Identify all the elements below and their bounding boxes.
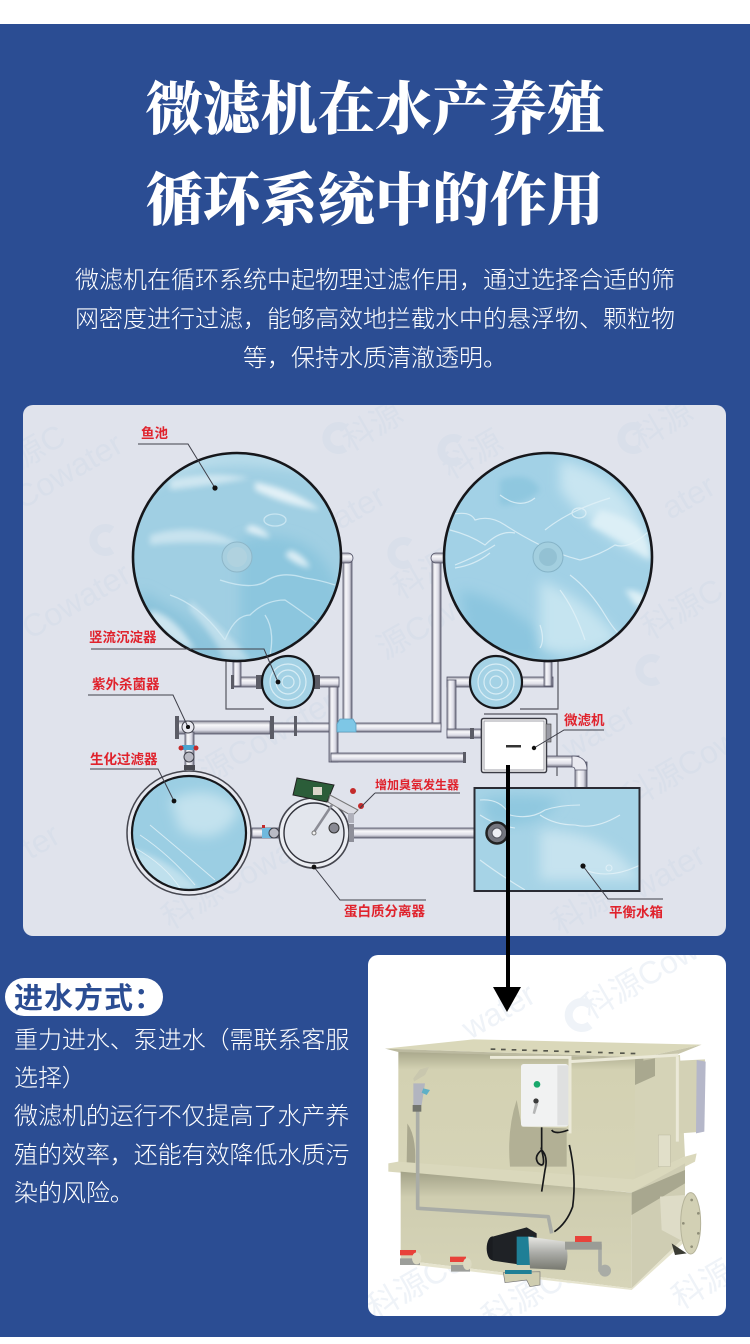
leader lines [88,444,663,900]
watermarks on panel: 科源 [336,395,409,458]
description text: 染的风险。 [14,1180,134,1207]
intro text: 微滤机在循环系统中起物理过滤作用，通过选择合适的筛 [75,267,675,294]
upper body [398,1052,635,1180]
balance tank [474,788,640,891]
right-side box [680,1059,705,1133]
pipe: UV to biofilter [185,732,194,772]
control box [521,1064,568,1127]
pipe: biofilter to skimmer [252,828,282,838]
panel background [23,405,726,936]
label: UV sterilizer: 紫外杀菌器 [92,676,160,692]
watermarks on panel: 科源 [436,423,509,486]
description text: 选择） [14,1065,86,1092]
watermarks on panel: ter [16,816,66,866]
strainer [413,1067,430,1112]
arrow [493,765,521,1012]
label: microfilter: 微滤机 [564,712,605,728]
vertical settler right [470,656,522,708]
label: fish pond: 鱼池 [141,425,168,441]
watermarks on panel: 科源Cowater [166,683,342,806]
pipe: left settler outlet [233,677,339,687]
watermarks on panel: Cowater [8,425,129,516]
watermarks on panel: Cowater [16,555,137,646]
cream conduit [490,1055,678,1142]
side flange [660,1193,701,1255]
white product card [368,955,726,1316]
label: protein skimmer: 蛋白质分离器 [344,903,425,919]
rim [388,1153,697,1193]
watermarks on panel: 科源 [626,393,699,456]
title line 1: 微滤机在水产养殖 [146,79,604,142]
heading chip: 进水方式： [14,982,164,1015]
pipe: right settler outlet [447,677,553,687]
grey inlet pipe [418,1110,600,1272]
description text [14,1027,349,1207]
pipe: UV section [178,721,270,734]
pool 2 [444,453,653,661]
panel: system diagram [5,405,726,1316]
control box shadow [509,1100,567,1167]
title [146,79,604,233]
description text: 重力进水、泵进水（需联系客服 [14,1027,349,1054]
pipe: lower horizontal [331,753,465,762]
card watermarks: water [455,976,542,1047]
machine photo [385,1039,706,1290]
watermarks on panel: 源Cow [370,586,472,666]
connector valve [262,825,279,838]
card watermarks: 科源 [666,1253,739,1316]
biofilter [127,771,251,895]
pipe fittings [175,675,522,763]
pool 1 [130,453,342,661]
intro text [75,267,675,372]
card watermarks [368,955,726,1316]
label: biofilter: 生化过滤器 [90,751,158,767]
pipe: left riser [343,557,352,724]
watermarks on panel: 科源 [386,543,459,606]
UV valve [178,721,198,770]
watermarks on panel: 科源 [546,878,619,941]
watermarks on panel: 源C [6,417,71,476]
watermarks on panel: water [625,836,712,907]
description text: 殖的效率，还能有效降低水质污 [14,1142,349,1169]
lid [385,1039,702,1057]
watermarks on panel [6,393,750,941]
leader dots [172,485,586,869]
label: ozone generator: 增加臭氧发生器 [375,777,459,792]
tank inlet flange [486,822,508,844]
pipe: return riser [329,680,338,762]
watermarks on panel: 科源Cowater [156,813,332,936]
ozone generator motor [293,778,334,802]
T joint [337,719,356,732]
vertical settler left [262,656,314,708]
title line 2: 循环系统中的作用 [146,170,604,233]
description text: 微滤机的运行不仅提高了水产养 [14,1103,349,1130]
microfilter [482,718,551,772]
pipes [178,553,587,838]
pipe: microfilter outlet [546,756,579,767]
intro text: 等，保持水质清澈透明。 [243,345,507,372]
watermarks on panel: ater [326,477,392,536]
watermarks on panel: 科源C [636,571,729,646]
lid slots [491,1048,635,1054]
lower body [401,1172,632,1288]
pipe stubs at pools [325,553,353,563]
watermarks on panel: ater [656,467,722,526]
drain block [658,1135,670,1167]
pipe: right riser [432,557,441,727]
pipe: main horizontal [270,723,441,732]
labels [89,425,663,920]
pipe: skimmer to tank [350,828,495,838]
card watermarks: 科源Cowater [476,1213,652,1336]
cables [536,1127,574,1232]
watermarks on panel: water [555,696,642,767]
protein skimmer [279,778,364,868]
intro text: 网密度进行过滤，能够高效地拦截水中的悬浮物、颗粒物 [75,306,675,333]
label: balance tank: 平衡水箱 [609,904,663,920]
pump [487,1227,602,1287]
label: vertical settler: 竖流沉淀器 [89,629,157,645]
leader-line frames behind settlers [226,660,558,776]
red valves [400,1236,611,1277]
card watermarks: 科源Cow [576,930,705,1026]
card watermarks: 科源Cowater [360,1203,537,1326]
